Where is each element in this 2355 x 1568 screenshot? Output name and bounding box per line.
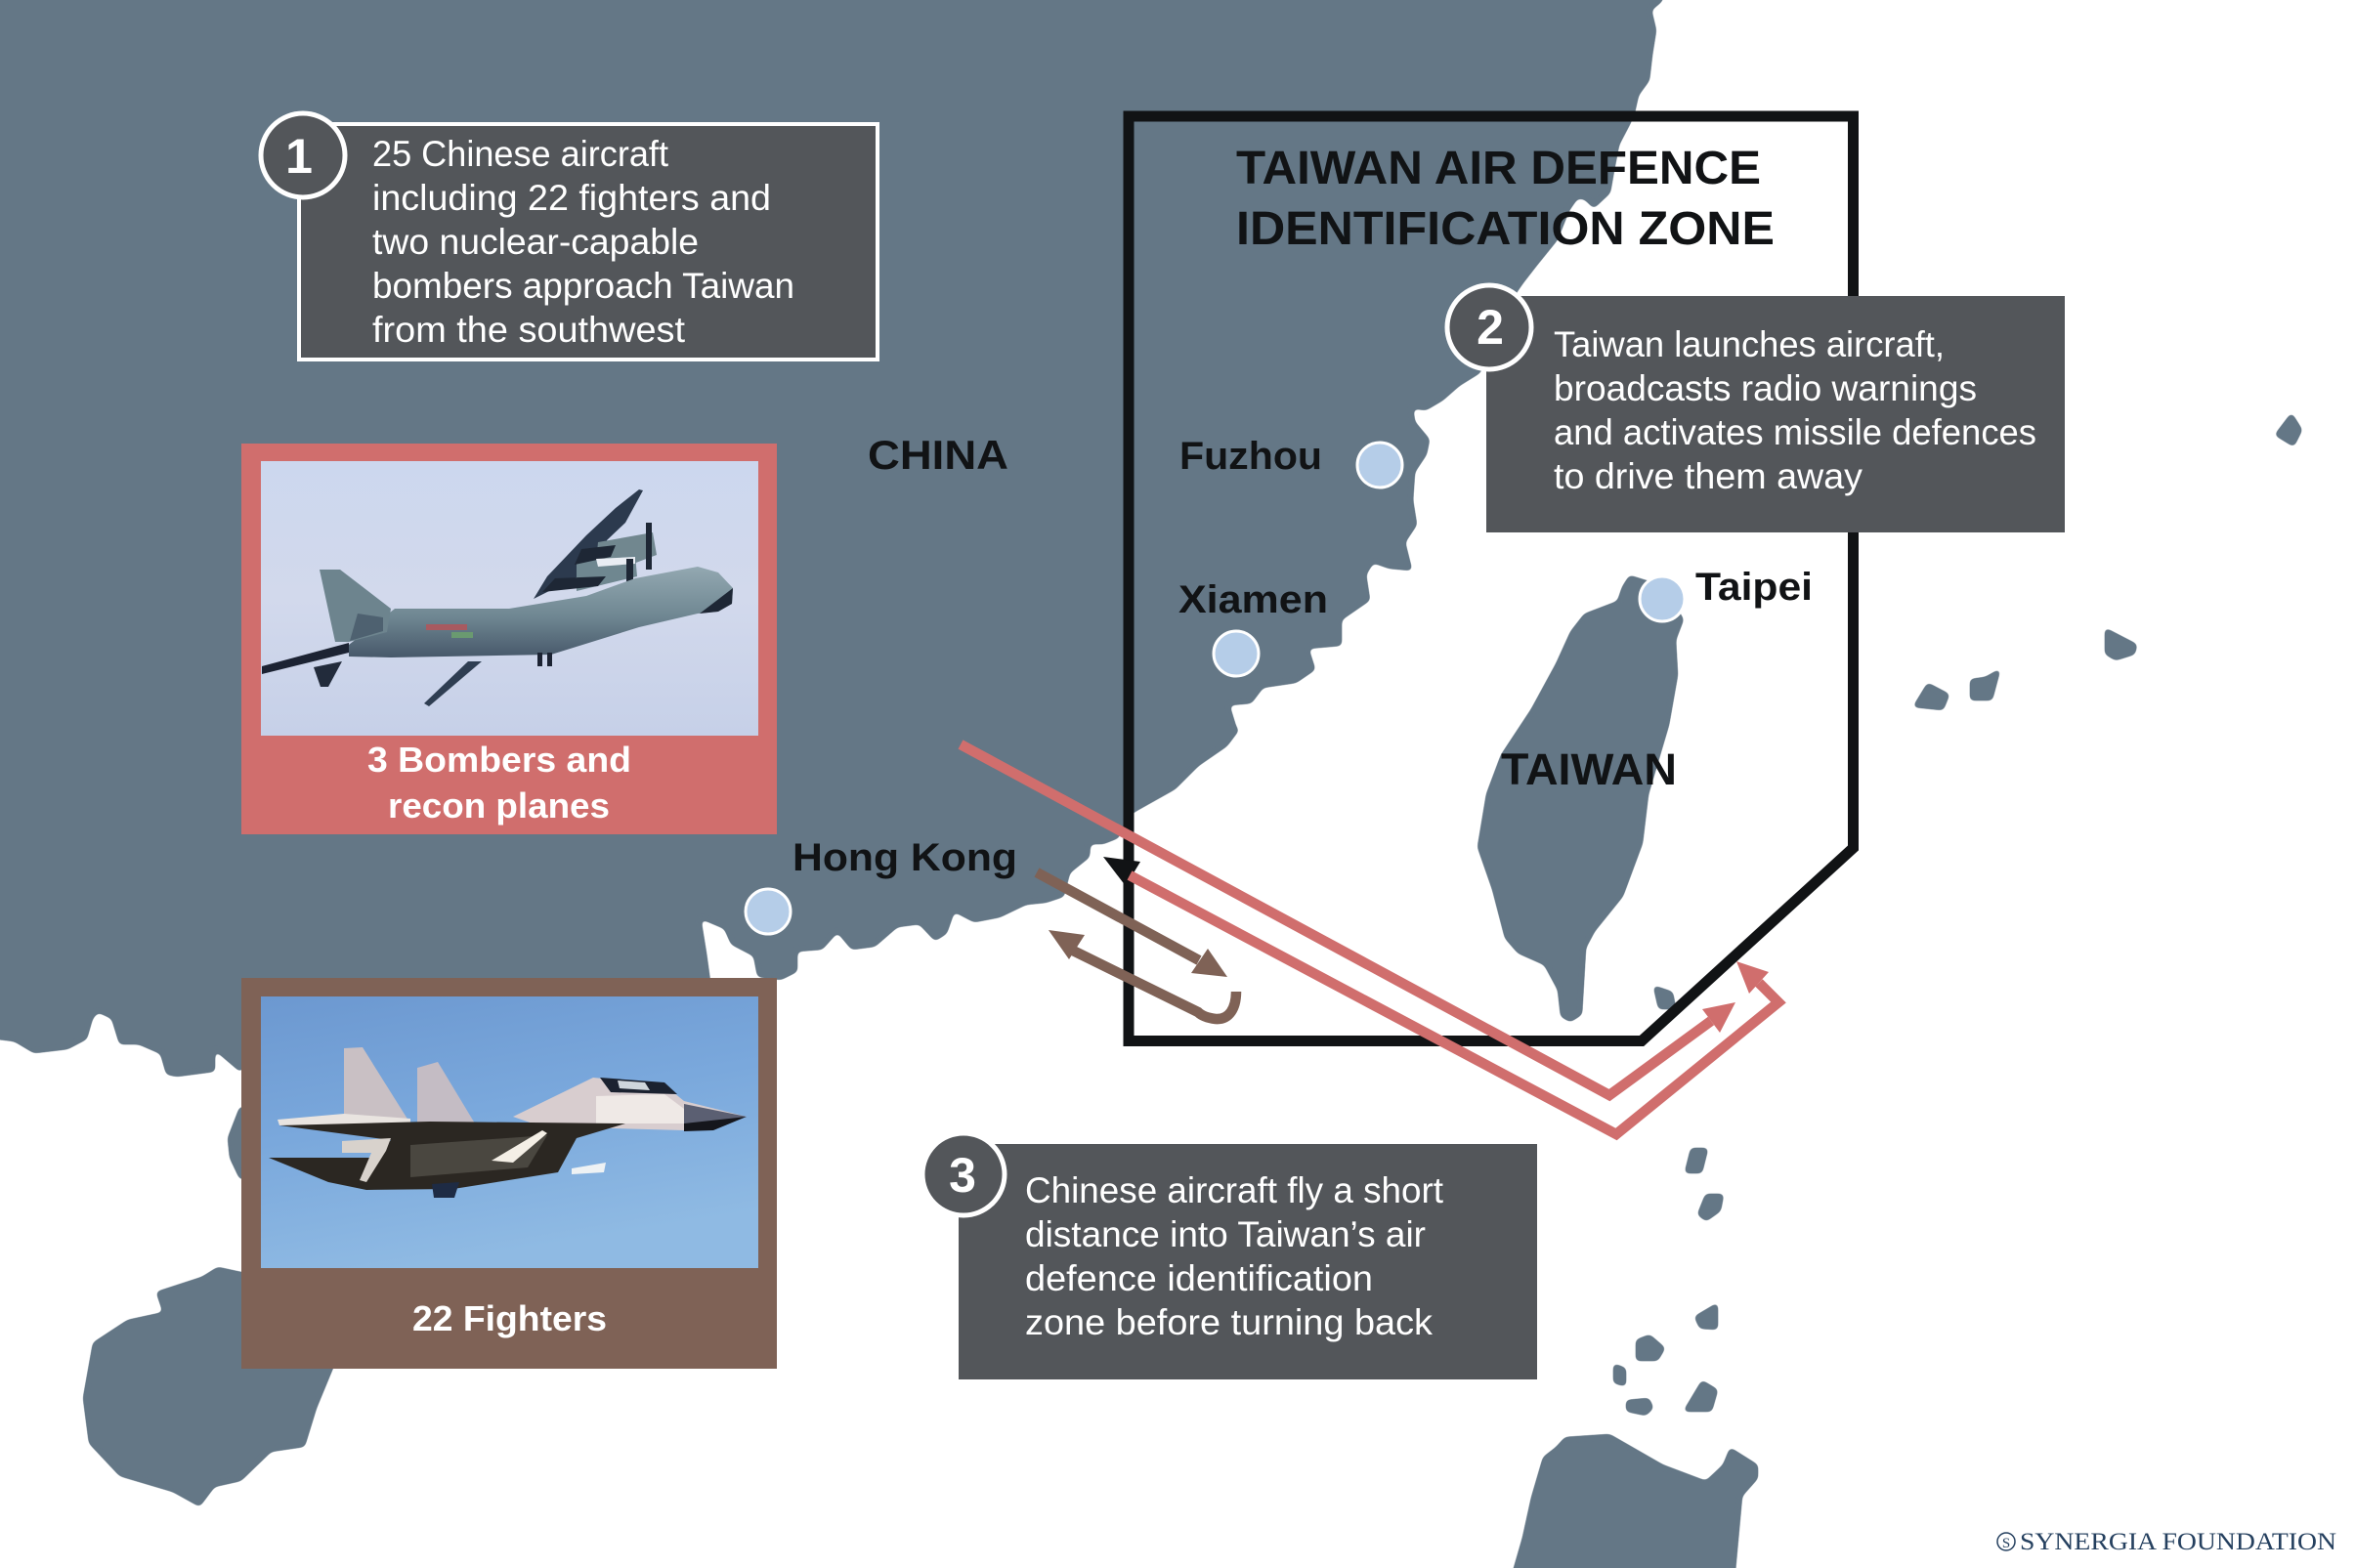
- land: Leizhou peninsula: [229, 1108, 274, 1178]
- callout 3: [922, 1133, 1537, 1379]
- caption: bombers: 3 Bombers and: [367, 740, 631, 780]
- label: Fuzhou: [1179, 435, 1402, 487]
- callout 2: to drive them away: [1554, 456, 1863, 496]
- callout 1: [261, 113, 878, 360]
- land: mainland China: [0, 0, 1673, 1076]
- callout 1: including 22 fighters and: [372, 178, 771, 218]
- caption: bombers: [367, 740, 631, 826]
- label: Hong Kong: [746, 836, 1017, 934]
- callout 3: 3: [949, 1148, 976, 1203]
- arrow: black entry marker: [1103, 857, 1140, 886]
- callout 1: two nuclear-capable: [372, 222, 699, 262]
- title: [1236, 143, 1775, 255]
- caption: fighters: 22 Fighters: [412, 1298, 607, 1338]
- callout 2: 2: [1477, 300, 1504, 355]
- image: recon plane: [261, 461, 758, 736]
- land: Taiwan island: [1478, 576, 1683, 1021]
- callout 2: Taiwan launches aircraft,: [1554, 324, 1945, 364]
- callout 3: zone before turning back: [1025, 1302, 1434, 1342]
- credit: Synergia Foundation: S: [2002, 1536, 2010, 1551]
- callout 2: [1447, 285, 2065, 532]
- label: Hong Kong: Hong Kong: [792, 836, 1017, 879]
- callout 1: 25 Chinese aircraft: [372, 134, 669, 174]
- arrow: first red flight path: [961, 744, 1735, 1095]
- image: fighter jet: [261, 996, 758, 1268]
- callout 1: from the southwest: [372, 310, 686, 350]
- arrow: brown return path: [1049, 930, 1236, 1019]
- label: Xiamen: Xiamen: [1178, 578, 1328, 621]
- title: TAIWAN AIR DEFENCE: [1236, 143, 1761, 194]
- land: Luzon: [1505, 1435, 1757, 1568]
- callout 1: bombers approach Taiwan: [372, 266, 794, 306]
- callout 2: broadcasts radio warnings: [1554, 368, 1977, 408]
- zone boundary: air defence identification zone: [1129, 116, 1853, 1041]
- label: Taipei: [1640, 566, 1813, 621]
- arrow: brown outbound path: [1037, 872, 1227, 977]
- land: small islands east: [1654, 414, 2301, 1008]
- callout 3: Chinese aircraft fly a short: [1025, 1170, 1444, 1210]
- panel: fighters: [241, 978, 777, 1369]
- caption: bombers: recon planes: [388, 785, 610, 826]
- panel: bombers and recon planes: [241, 444, 777, 834]
- callout 2: and activates missile defences: [1554, 412, 2036, 452]
- title: IDENTIFICATION ZONE: [1236, 203, 1775, 255]
- callout 3: distance into Taiwan’s air: [1025, 1214, 1426, 1254]
- label: Taipei: Taipei: [1695, 566, 1813, 609]
- label: China: CHINA: [868, 432, 1008, 478]
- land: small islands south: [1614, 1149, 1723, 1415]
- arrow: second red flight path: [1130, 875, 1778, 1134]
- label: Taiwan: TAIWAN: [1501, 744, 1677, 794]
- label: Xiamen: [1178, 578, 1328, 676]
- label: Fuzhou: Fuzhou: [1179, 435, 1322, 478]
- callout 3: defence identification: [1025, 1258, 1373, 1298]
- callout 1: 1: [285, 129, 313, 184]
- credit: Synergia Foundation: SYNERGIA FOUNDATION: [2020, 1529, 2336, 1555]
- land: Hainan: [84, 1268, 334, 1505]
